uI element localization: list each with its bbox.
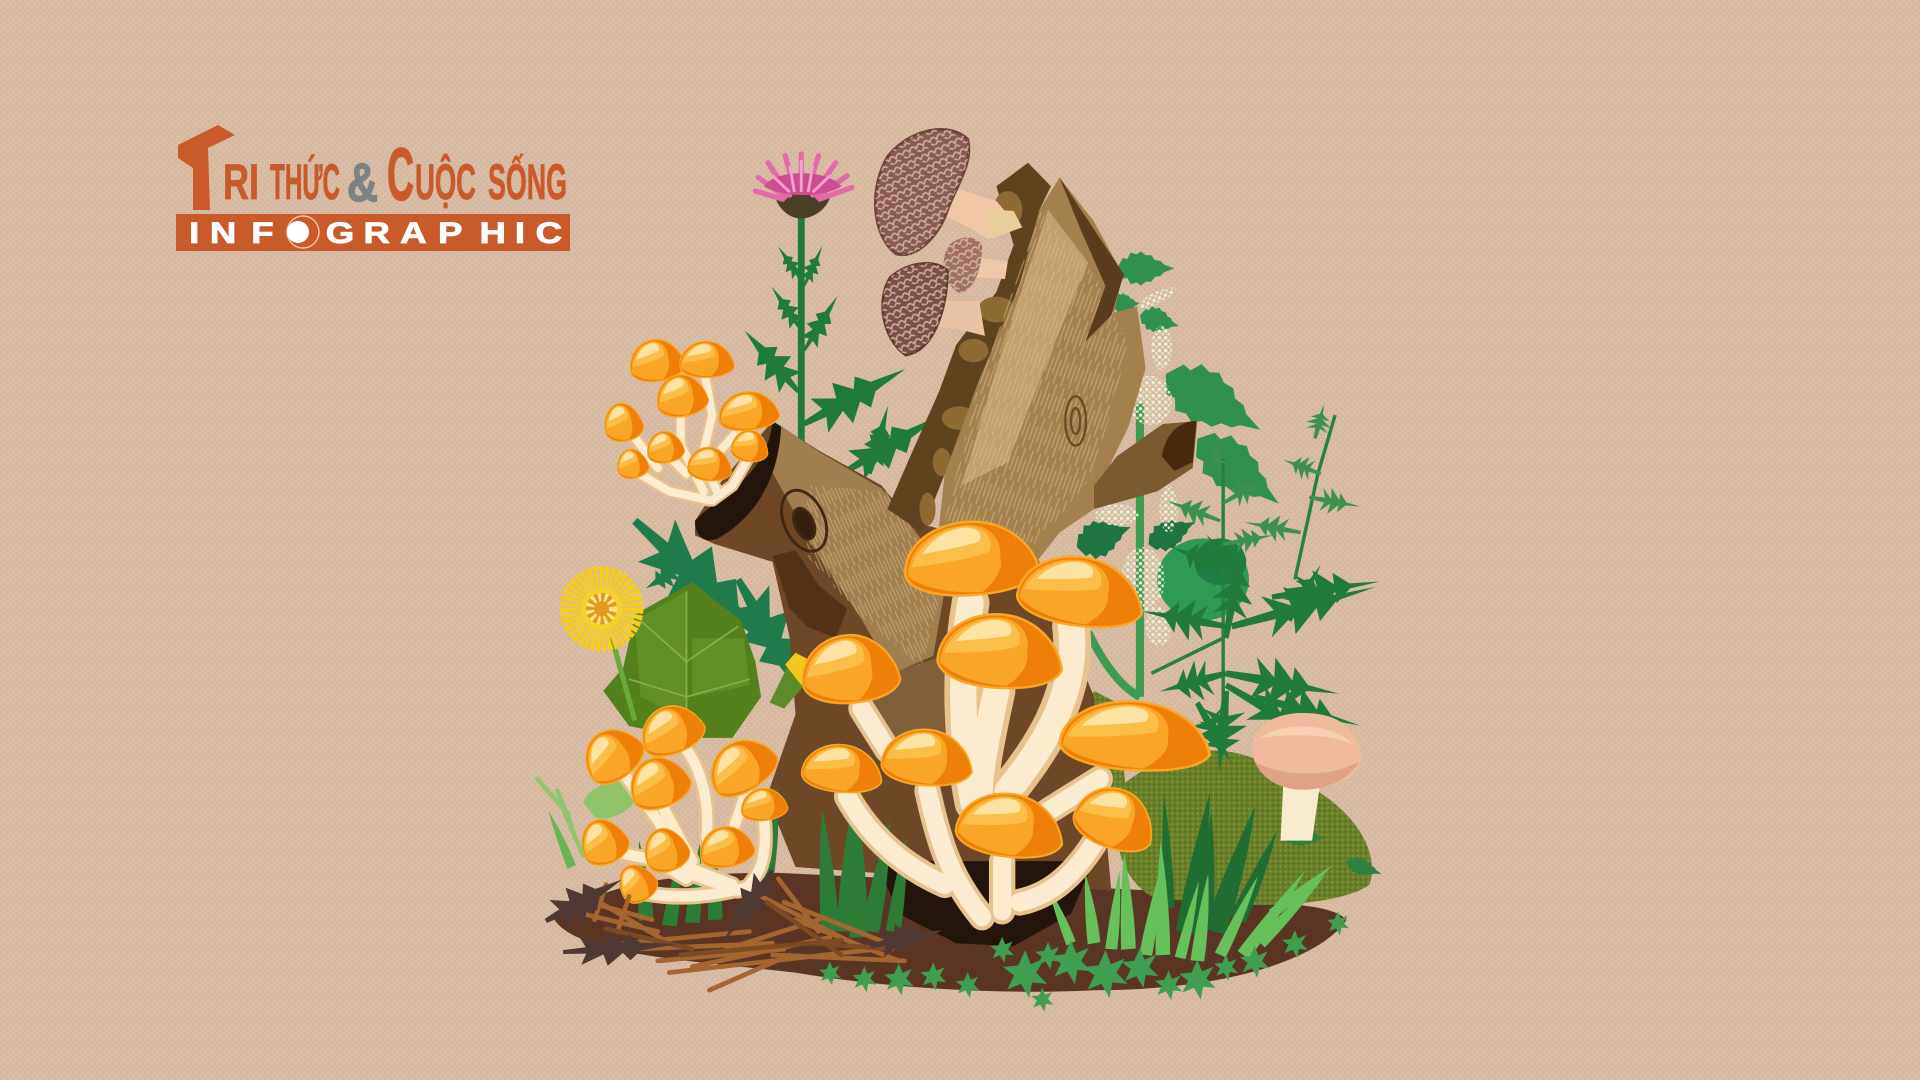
stump: dark patches on left [773, 550, 847, 638]
stump: dark roots [876, 861, 1094, 946]
stems [618, 750, 765, 896]
plant: yellow flower and large green leaf [537, 579, 807, 855]
yellow flower head [573, 579, 630, 638]
stump: left branch light wood [767, 424, 948, 673]
stump: dark bark [887, 163, 1051, 532]
stump: right branch [1094, 421, 1197, 509]
pink mushroom [1252, 713, 1361, 841]
stump: base and lower trunk [695, 421, 1111, 890]
plant: feathery wormwood [1138, 401, 1383, 778]
logo: big letter T [178, 125, 235, 210]
stump: dark cut end [695, 421, 781, 540]
small brown mushroom [944, 238, 1008, 293]
stump: knot [773, 483, 836, 559]
medium brown mushroom [882, 263, 985, 355]
logo: title words: RI [223, 154, 259, 210]
brown mushrooms on the bark [875, 129, 1022, 355]
stump: upright light wood [939, 177, 1146, 562]
ground sprigs [819, 911, 1349, 1012]
pine needles and dead leaves [537, 860, 947, 990]
logo: title words: UỘC [415, 153, 476, 210]
caps [799, 517, 1212, 862]
big green leaf [603, 582, 761, 738]
illustration: mushrooms on tree stump [537, 129, 1384, 1012]
ground soil [554, 873, 1347, 992]
caps [573, 695, 789, 909]
plant: thistle [731, 154, 951, 491]
logo: Tri thức & Cuộc sống Infographic [176, 125, 570, 251]
logo: title words [223, 133, 567, 216]
mushrooms: main cluster [799, 517, 1212, 917]
mushrooms: top-left cluster [601, 335, 781, 500]
caps [601, 335, 781, 482]
stump: lower shadow [841, 656, 945, 755]
stump: right edge shadow [1060, 177, 1124, 342]
mushrooms: bottom-left cluster [573, 695, 789, 909]
logo: title words: & [347, 153, 378, 213]
logo: title words: THỨC [270, 154, 340, 210]
logo: infographic bar: INFGRAPHIC [189, 217, 562, 250]
tree stump [695, 163, 1197, 946]
plant: nettle with white flowers [1070, 252, 1294, 697]
plant: fern behind left stump [613, 496, 832, 716]
grass behind mushrooms [542, 785, 911, 938]
yellow bud [770, 653, 807, 709]
stems [847, 603, 1100, 917]
stems [629, 368, 750, 500]
grass right foreground [1041, 791, 1384, 962]
logo: title words: C [387, 133, 414, 216]
moss mound [1037, 691, 1372, 905]
logo: title words: SỐNG [488, 153, 567, 210]
large brown mushroom [875, 129, 1022, 255]
stump: knot on upright [1065, 396, 1086, 446]
